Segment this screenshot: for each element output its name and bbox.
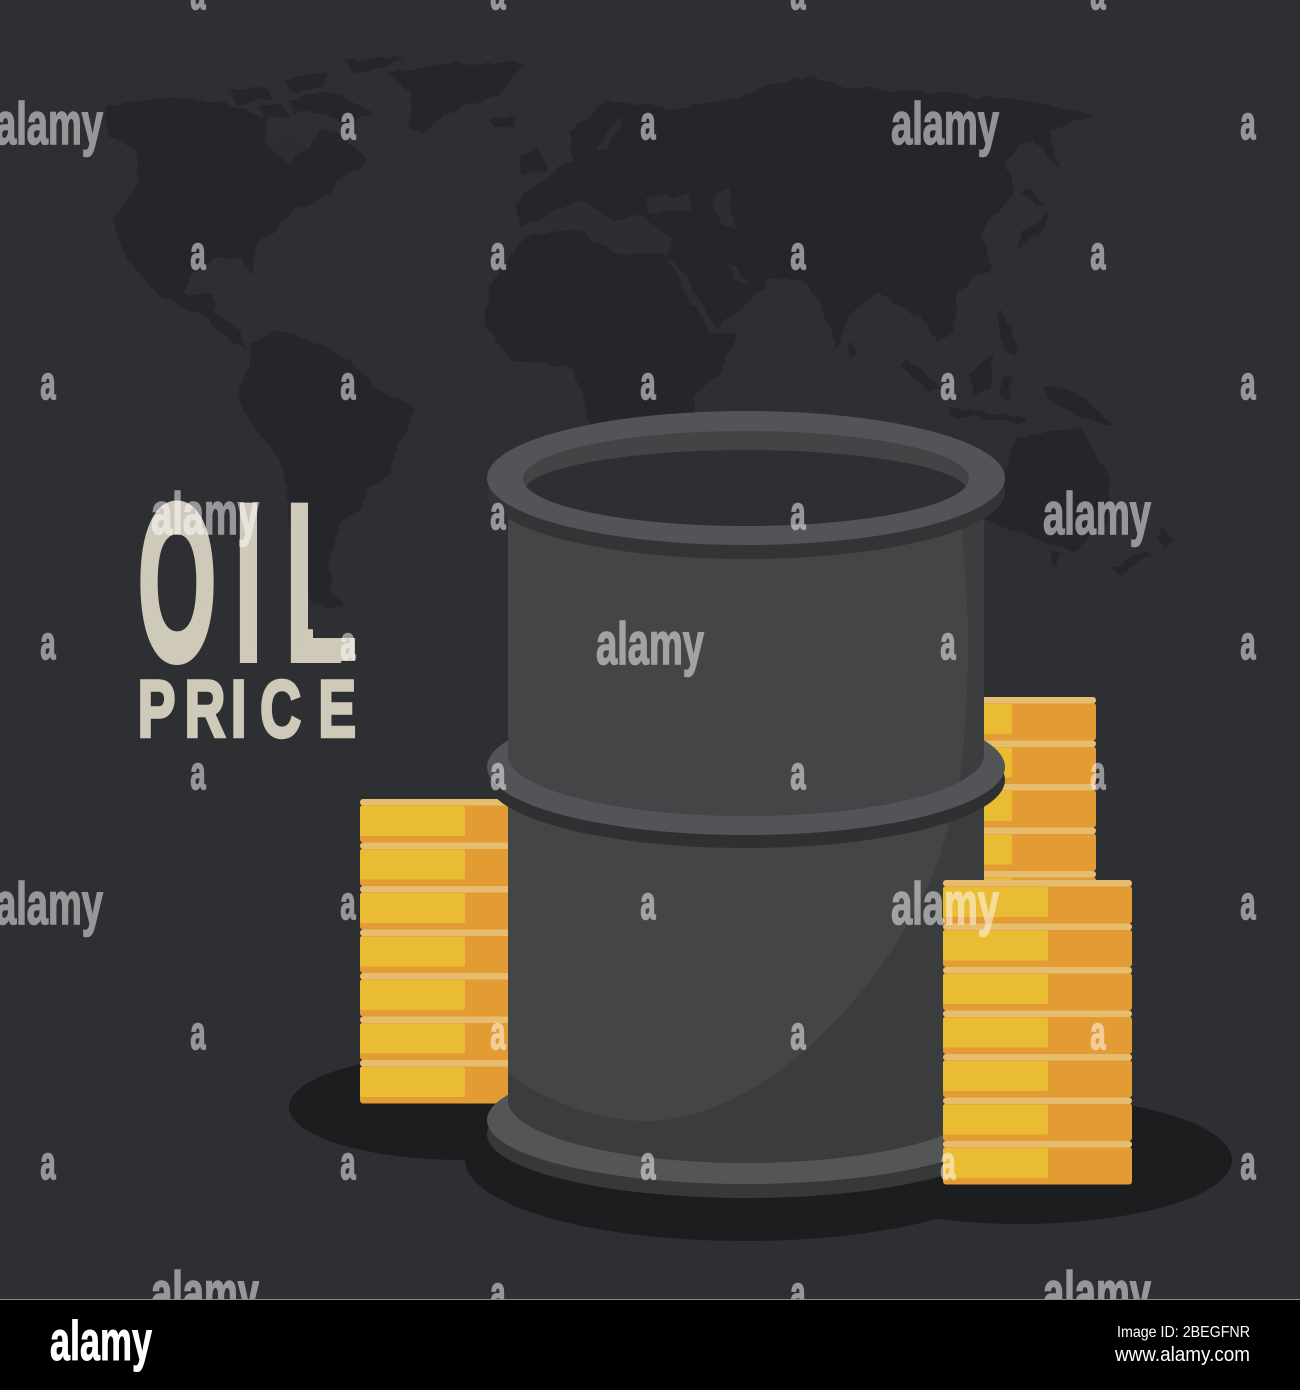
watermark grid: a [790, 1007, 806, 1060]
watermark grid: a [340, 97, 356, 150]
watermark grid: a [190, 747, 206, 800]
watermark grid: alamy [151, 1260, 259, 1326]
watermark grid: alamy [1043, 1260, 1151, 1326]
australia [985, 429, 1109, 550]
tasmania and new zealand [1050, 528, 1173, 573]
website: www.alamy.com [1114, 1344, 1250, 1366]
watermark grid: a [490, 1007, 506, 1060]
footer bar [0, 1299, 1300, 1390]
title word PRICE: PRICE [138, 664, 356, 754]
watermark grid: a [640, 97, 656, 150]
watermark grid: a [640, 1137, 656, 1190]
iceland and britain [491, 116, 545, 172]
watermark grid: a [340, 617, 356, 670]
arctic islands [228, 60, 400, 124]
watermark grid: a [190, 1007, 206, 1060]
oil barrel [487, 411, 1005, 1198]
watermark grid: a [490, 487, 506, 540]
watermark grid: a [640, 357, 656, 410]
image id: Image ID: 2BEGFNR [1117, 1324, 1250, 1341]
watermark grid: alamy [151, 481, 259, 547]
watermark grid: alamy [891, 871, 999, 937]
watermark grid: a [940, 357, 956, 410]
watermark grid: a [790, 487, 806, 540]
barrel middle ring [487, 699, 1005, 848]
watermark grid: a [40, 357, 56, 410]
watermark grid: alamy [1043, 481, 1151, 547]
watermark grid: a [1090, 747, 1106, 800]
watermark grid: a [1240, 877, 1256, 930]
world map [108, 60, 1173, 607]
greenland [388, 64, 524, 134]
barrel lower body [508, 806, 984, 1163]
watermark grid: a [1090, 1007, 1106, 1060]
watermark grid: a [1090, 227, 1106, 280]
watermark grid: a [340, 1137, 356, 1190]
south america [240, 331, 414, 607]
barrel upper body [508, 518, 984, 816]
ground shadows [289, 1054, 1232, 1241]
coin stack: back right [907, 697, 1096, 914]
watermark grid: a [490, 747, 506, 800]
watermark grid: a [640, 877, 656, 930]
eurasia [517, 76, 1091, 345]
watermark grid: alamy [596, 611, 704, 677]
southeast asia islands [849, 310, 1113, 425]
watermark grid: a [790, 1267, 806, 1320]
watermark grid: a [1240, 1137, 1256, 1190]
coin stack: left [360, 799, 549, 1104]
title word OIL: OIL [140, 468, 340, 699]
watermark grid: a [940, 617, 956, 670]
japan and sakhalin [1017, 188, 1047, 246]
watermark grid: a [790, 747, 806, 800]
watermark grid: a [1240, 97, 1256, 150]
coin stack: front right [943, 880, 1132, 1184]
watermark grid: a [1240, 617, 1256, 670]
barrel top rim [487, 411, 1005, 559]
inland seas [265, 117, 750, 334]
watermark grid: a [940, 1137, 956, 1190]
watermark grid: a [490, 227, 506, 280]
watermark grid: alamy [891, 91, 999, 157]
barrel bottom ring [487, 1056, 1005, 1198]
watermark grid: a [790, 227, 806, 280]
watermark grid: a [490, 1267, 506, 1320]
watermark grid: a [40, 1137, 56, 1190]
africa [485, 229, 737, 430]
watermark grid: a [340, 877, 356, 930]
footer logo: alamy [50, 1309, 152, 1372]
north america [108, 99, 367, 348]
title: OIL PRICE [138, 468, 357, 754]
watermark grid: a [1240, 357, 1256, 410]
watermark grid: a [40, 617, 56, 670]
watermark grid: a [340, 357, 356, 410]
watermark grid: a [190, 227, 206, 280]
